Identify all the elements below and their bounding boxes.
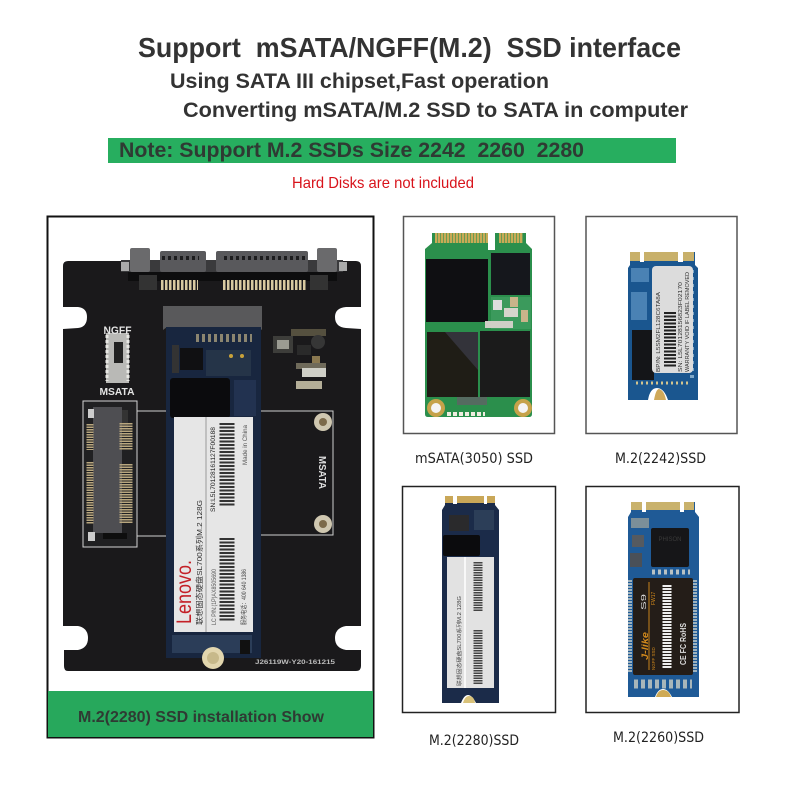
SSD label: 联想固态硬盘SL700系列M.2 128G	[194, 500, 204, 625]
gold fingers	[435, 233, 523, 243]
mode switch: NGFF	[104, 325, 132, 337]
2260 controller: PHISON	[658, 537, 682, 543]
2260 components	[630, 518, 695, 684]
2280 gold fingers	[445, 496, 495, 503]
2242 board	[628, 252, 698, 400]
power circuit	[273, 329, 326, 389]
MSATA mounting standoffs	[314, 413, 332, 533]
SSD label: Made in China	[243, 424, 249, 465]
2242 label	[652, 266, 693, 373]
2280 chips	[443, 510, 494, 556]
caption: M.2 2280: M.2(2280)SSD	[429, 733, 519, 749]
caption: M.2 2260: M.2(2260)SSD	[613, 730, 704, 746]
panel: M.2 2280 SSD	[402, 486, 556, 712]
white silk lines	[137, 411, 333, 536]
adapter board	[63, 261, 361, 671]
2280 label	[447, 557, 494, 688]
2260 black label: J-like	[640, 632, 650, 660]
mode switch: MSATA	[100, 387, 134, 398]
2260 gold fingers	[631, 502, 694, 510]
panel: mSATA 3050 SSD	[404, 216, 554, 434]
caption: mSATA: mSATA(3050) SSD	[415, 451, 533, 467]
mounting screw	[202, 647, 224, 669]
MSATA silk label: MSATA	[316, 456, 328, 489]
2242 label: WARRANTY VOID IF LABEL REMOVED	[685, 272, 691, 372]
mode switch	[100, 325, 134, 398]
2280 board	[442, 496, 499, 703]
2242 notch	[654, 389, 666, 400]
M.2 2280 SSD	[166, 327, 261, 658]
SSD label: 服务电话：400 640 1386	[240, 568, 248, 625]
2260 board	[628, 502, 699, 697]
M.2 socket	[163, 306, 262, 330]
2260 black label: NGFF SSD	[651, 646, 656, 670]
memory chips	[426, 253, 530, 397]
SSD label: LC P/N:(1P)AX8505690	[212, 568, 218, 625]
2260 black label: FW17	[651, 591, 657, 605]
subtitle: chipset: Using SATA III chipset,Fast operation	[170, 69, 549, 93]
SSD label	[173, 417, 253, 632]
SSD label: SN:L5L70128161127F00188	[211, 426, 217, 512]
SSD label: Lenovo.	[173, 560, 196, 624]
2260 controller	[651, 528, 689, 567]
board revision text: J26119W-Y20-161215	[255, 659, 335, 666]
2242 gold fingers	[630, 252, 694, 261]
2242 chip	[632, 330, 654, 380]
installation caption	[48, 691, 373, 737]
2242 label: SN: L5L70128156823F02170	[678, 282, 684, 372]
note banner: Note: Support M.2 SSDs Size 2242 2260 2280	[119, 138, 584, 162]
2260 black label: CE FC RoHS	[679, 622, 688, 665]
2260 black label: S9	[641, 594, 648, 610]
title: Support mSATA/NGFF(M.2) SSD interface	[138, 32, 681, 63]
2280 notch	[463, 696, 475, 703]
panel: M.2 2260 SSD	[586, 486, 739, 712]
2242 trace detail	[631, 268, 692, 383]
SATA connector	[121, 248, 347, 290]
2242 label: BP/N: L5SM2FL128C6TA8A	[656, 291, 662, 372]
installation caption: M.2(2280) SSD installation Show	[78, 709, 325, 726]
2280 label: 联想固态硬盘SL700系列M.2 128G	[456, 596, 463, 686]
disclaimer: Hard Disks are not included	[292, 175, 474, 192]
caption: M.2 2242: M.2(2242)SSD	[615, 451, 706, 467]
mounting holes	[427, 399, 532, 417]
panel: M.2 2242 SSD	[586, 216, 737, 434]
mSATA socket	[83, 401, 137, 547]
2260 black label	[633, 578, 693, 675]
2260 notch	[656, 690, 671, 697]
panel: installation show	[48, 216, 374, 738]
passive components	[457, 297, 531, 405]
subtitle: converting: Converting mSATA/M.2 SSD to SATA in computer	[183, 98, 689, 122]
mSATA board	[425, 233, 532, 417]
